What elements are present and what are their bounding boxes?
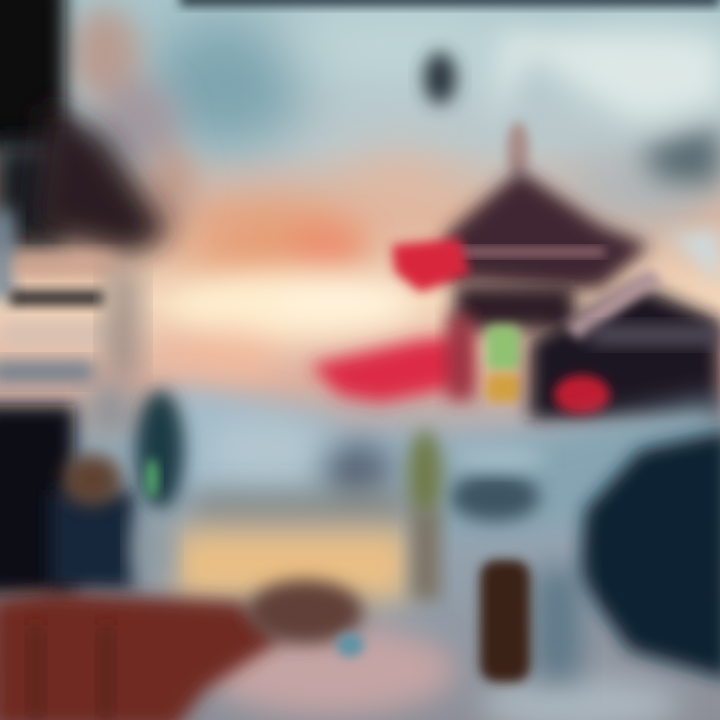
- roof highlight: [455, 248, 605, 256]
- pale corner: [670, 230, 720, 285]
- temple body: [455, 285, 575, 330]
- lower left dark figures: [0, 390, 184, 595]
- top edge dark band: [180, 0, 720, 6]
- right wing ridge: [565, 268, 662, 340]
- left building: [0, 0, 172, 435]
- red pillar: [448, 315, 474, 400]
- lower red eave: [310, 335, 465, 402]
- upper red eave: [392, 238, 470, 292]
- green banner: [486, 325, 520, 371]
- temple spire: [507, 122, 529, 178]
- red doorway: [554, 375, 610, 415]
- upper roof: [445, 170, 650, 290]
- temple: [310, 122, 720, 420]
- distant mountains: [165, 385, 391, 496]
- sandy ground: [175, 497, 680, 720]
- standing figure: [408, 430, 442, 600]
- hanging dark lantern: [424, 52, 456, 104]
- right wing roof: [530, 285, 720, 420]
- wing pale band: [590, 326, 720, 344]
- foreground rust textile: [0, 580, 364, 720]
- sky colour clouds: [69, 5, 720, 381]
- foreground brown bottle: [480, 560, 530, 682]
- lower right snowy rocks: [440, 400, 720, 680]
- yellow banner: [486, 374, 520, 402]
